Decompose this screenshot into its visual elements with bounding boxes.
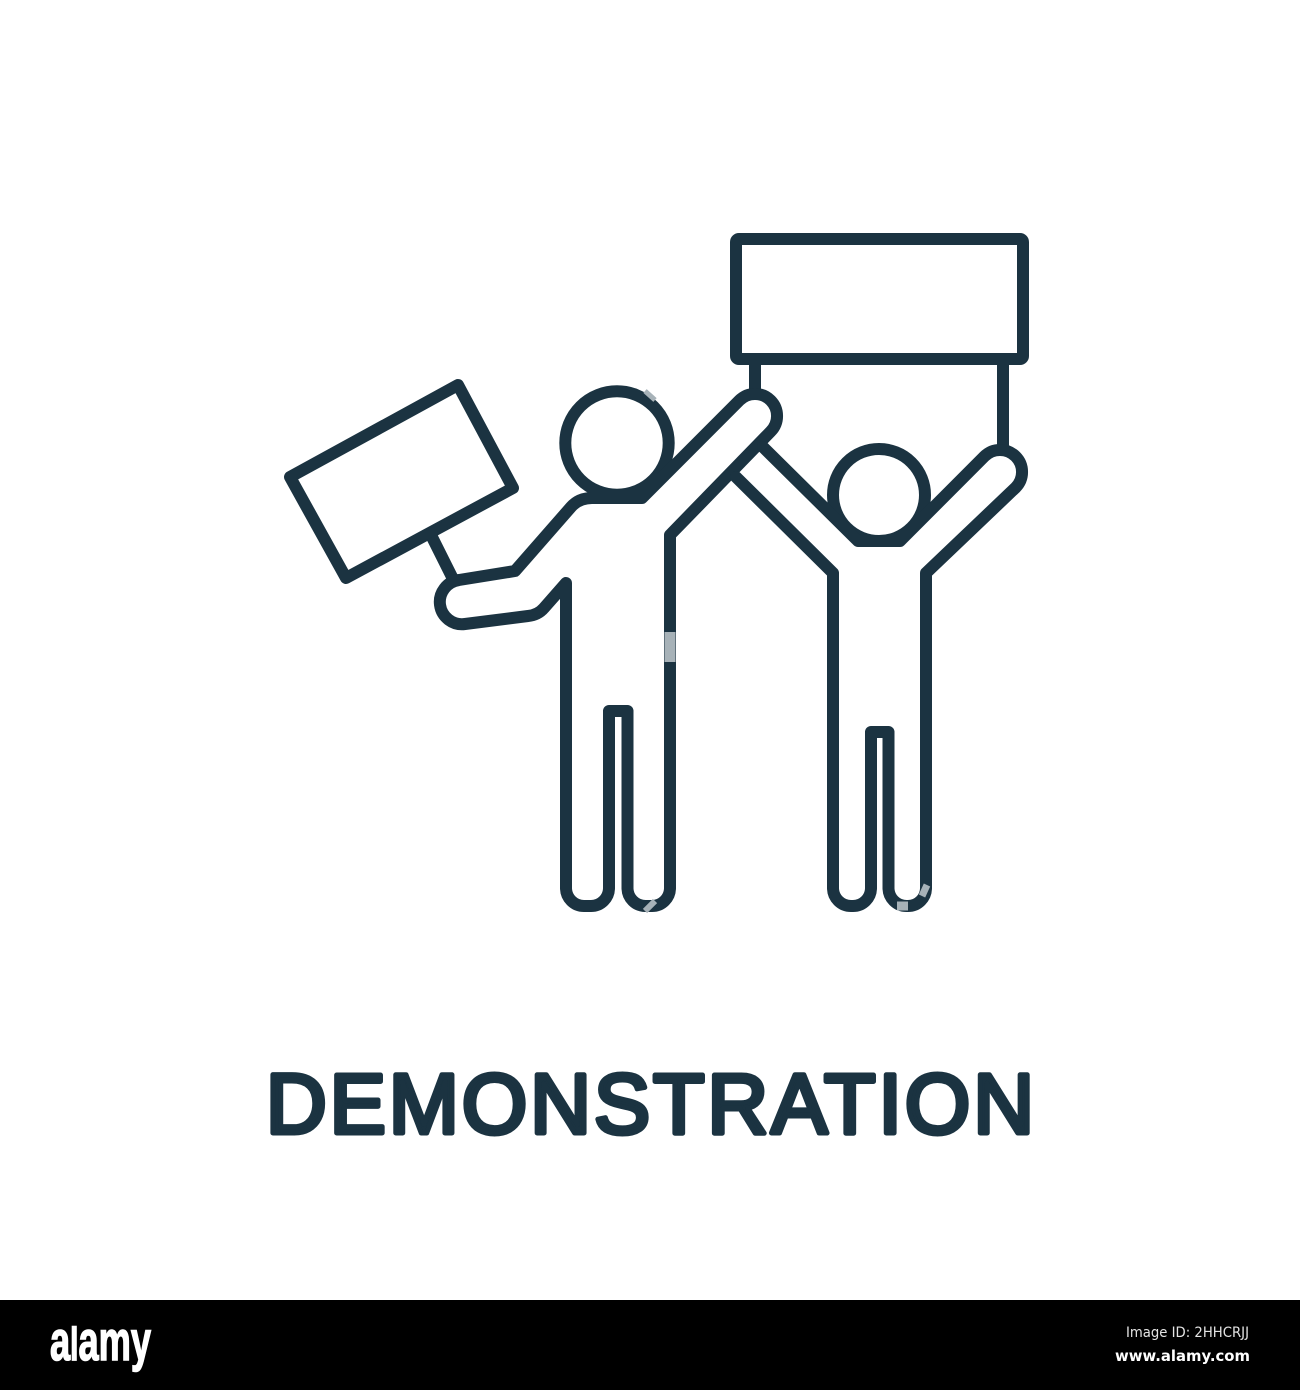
- icon: left person: [440, 391, 777, 906]
- image id: Image ID: 2HHCRJJ: [1126, 1325, 1249, 1341]
- icon: right person: [736, 447, 1022, 906]
- icon: right placard: [736, 239, 1023, 452]
- logo: alamy: alamy: [50, 1309, 151, 1372]
- footer bar: [0, 1300, 1300, 1390]
- website: www.alamy.com: [1115, 1347, 1250, 1365]
- icon: left placard: [290, 385, 513, 578]
- icon: demonstration: [290, 239, 1023, 906]
- title: DEMONSTRATION: [266, 1057, 1034, 1151]
